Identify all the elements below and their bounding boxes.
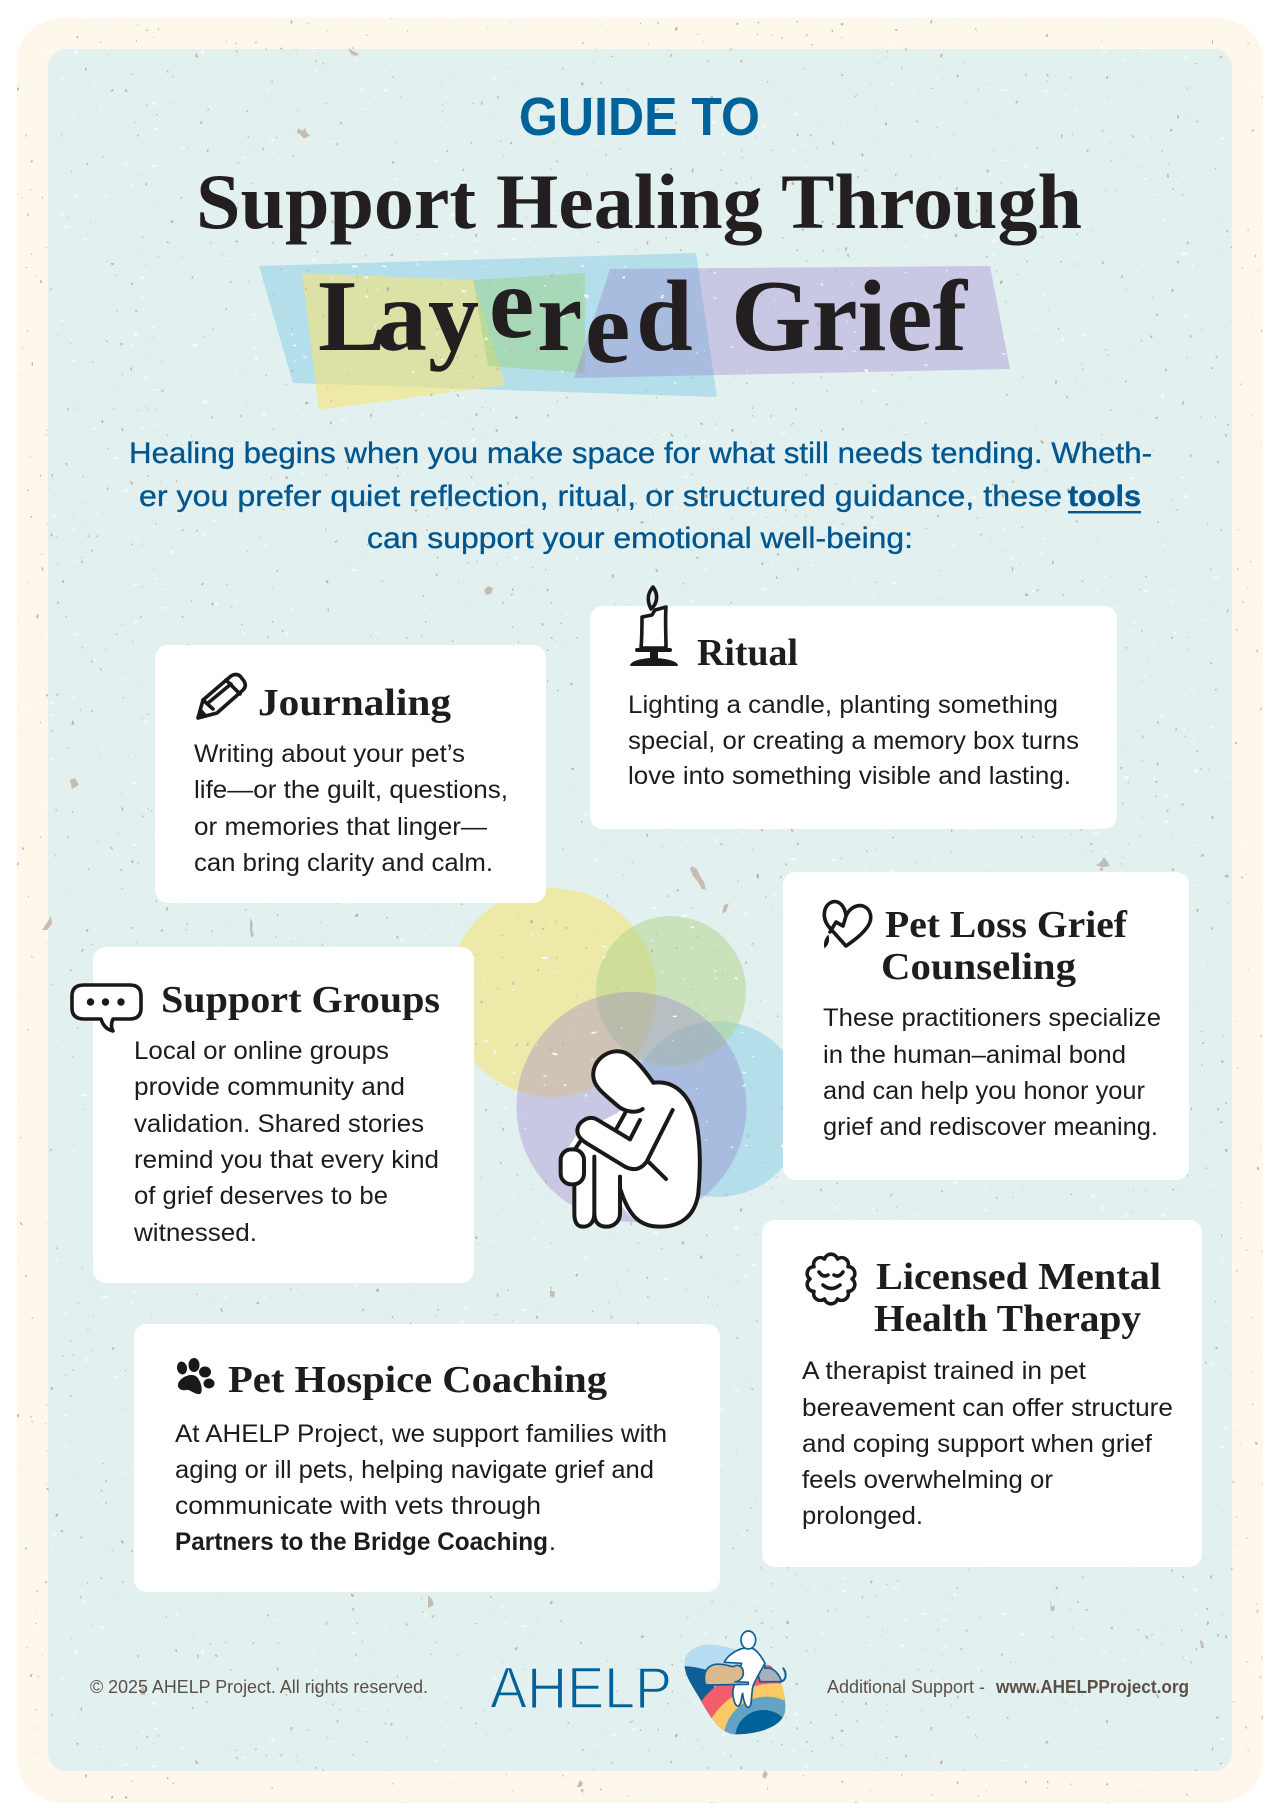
body text — [133, 1037, 439, 1247]
icon: paw print — [176, 1358, 214, 1394]
icon: speech bubble — [72, 985, 141, 1031]
body text: These practitioners specialize — [823, 1004, 1161, 1032]
overlapping shapes behind layered grief — [259, 253, 1010, 410]
panel: licensed mental health therapy — [762, 1220, 1202, 1567]
icon: pencil — [198, 674, 245, 718]
body text: communicate with vets through — [175, 1492, 541, 1520]
body text: Lighting a candle, planting something — [628, 691, 1058, 719]
body text: . — [549, 1528, 556, 1556]
title: support healing through: Support Healing Through — [196, 158, 1082, 245]
heading — [881, 904, 1128, 988]
body text: life—or the guilt, questions, — [194, 776, 508, 804]
body text: witnessed. — [133, 1219, 257, 1247]
body text: aging or ill pets, helping navigate grief and — [175, 1456, 654, 1484]
body text — [823, 1004, 1161, 1141]
icon: broken heart — [824, 902, 871, 947]
body text: remind you that every kind — [134, 1146, 439, 1174]
title: layered grief — [318, 247, 968, 385]
heading: Support Groups — [161, 979, 440, 1021]
heading: Health Therapy — [874, 1298, 1141, 1340]
body text: and coping support when grief — [802, 1430, 1152, 1458]
body text: of grief deserves to be — [134, 1182, 388, 1210]
body text — [628, 691, 1079, 790]
panel: ritual — [590, 587, 1117, 829]
body text — [175, 1420, 667, 1556]
footer: AHELP logo mark — [684, 1630, 787, 1734]
panel: pet hospice coaching — [134, 1324, 720, 1592]
body text — [802, 1357, 1173, 1530]
intro paragraph — [129, 437, 1152, 555]
title: layered grief: Grief — [731, 260, 968, 373]
heading: Pet Hospice Coaching — [228, 1359, 607, 1401]
body text: can bring clarity and calm. — [194, 849, 493, 877]
body text: feels overwhelming or — [802, 1466, 1053, 1494]
heading: Journaling — [258, 682, 451, 724]
body text: love into something visible and lasting. — [628, 762, 1071, 790]
intro paragraph: can support your emotional well-being: — [367, 522, 913, 555]
body text: prolonged. — [802, 1502, 923, 1530]
icon: grieving seated figure — [561, 1051, 700, 1227]
title: guide to: GUIDE TO — [519, 87, 760, 147]
panel: pet loss grief counseling — [783, 872, 1189, 1180]
panel: support groups — [72, 947, 474, 1283]
footer: AHELP wordmark: AHELP — [490, 1656, 672, 1721]
heading — [874, 1256, 1161, 1340]
body text: Writing about your pet’s — [194, 740, 465, 768]
title: layered grief: Layered — [318, 247, 693, 385]
footer: copyright: © 2025 AHELP Project. All rights reserved. — [90, 1677, 428, 1697]
body text: A therapist trained in pet — [802, 1357, 1086, 1385]
footer: additional support: www.AHELPProject.org — [995, 1677, 1189, 1697]
body text: and can help you honor your — [823, 1077, 1145, 1105]
body text — [194, 740, 508, 877]
heading: Counseling — [881, 946, 1076, 988]
heading: Ritual — [697, 632, 798, 674]
body text: bereavement can offer structure — [802, 1394, 1173, 1422]
body text: in the human–animal bond — [823, 1041, 1126, 1069]
heading: Pet Loss Grief — [885, 904, 1128, 946]
body text: validation. Shared stories — [134, 1110, 424, 1138]
footer: additional support — [827, 1677, 1189, 1697]
icon: candle — [630, 587, 678, 666]
body text: or memories that linger— — [194, 813, 487, 841]
body text: grief and rediscover meaning. — [823, 1113, 1158, 1141]
body text: Local or online groups — [134, 1037, 389, 1065]
intro paragraph: tools — [1068, 480, 1141, 513]
body text: At AHELP Project, we support families with — [175, 1420, 667, 1448]
body text: provide community and — [134, 1073, 405, 1101]
intro paragraph: er you prefer quiet reflection, ritual, or structured guidance, these — [139, 480, 1062, 513]
icon: smiling flower — [807, 1254, 855, 1304]
overlapping circles — [448, 888, 805, 1222]
body text: Partners to the Bridge Coaching — [175, 1528, 548, 1556]
body text: special, or creating a memory box turns — [628, 727, 1079, 755]
footer: additional support: Additional Support - — [827, 1677, 985, 1697]
heading: Licensed Mental — [876, 1256, 1161, 1298]
panel: journaling — [155, 645, 546, 903]
intro paragraph: Healing begins when you make space for what still needs tending. Wheth- — [129, 437, 1152, 470]
